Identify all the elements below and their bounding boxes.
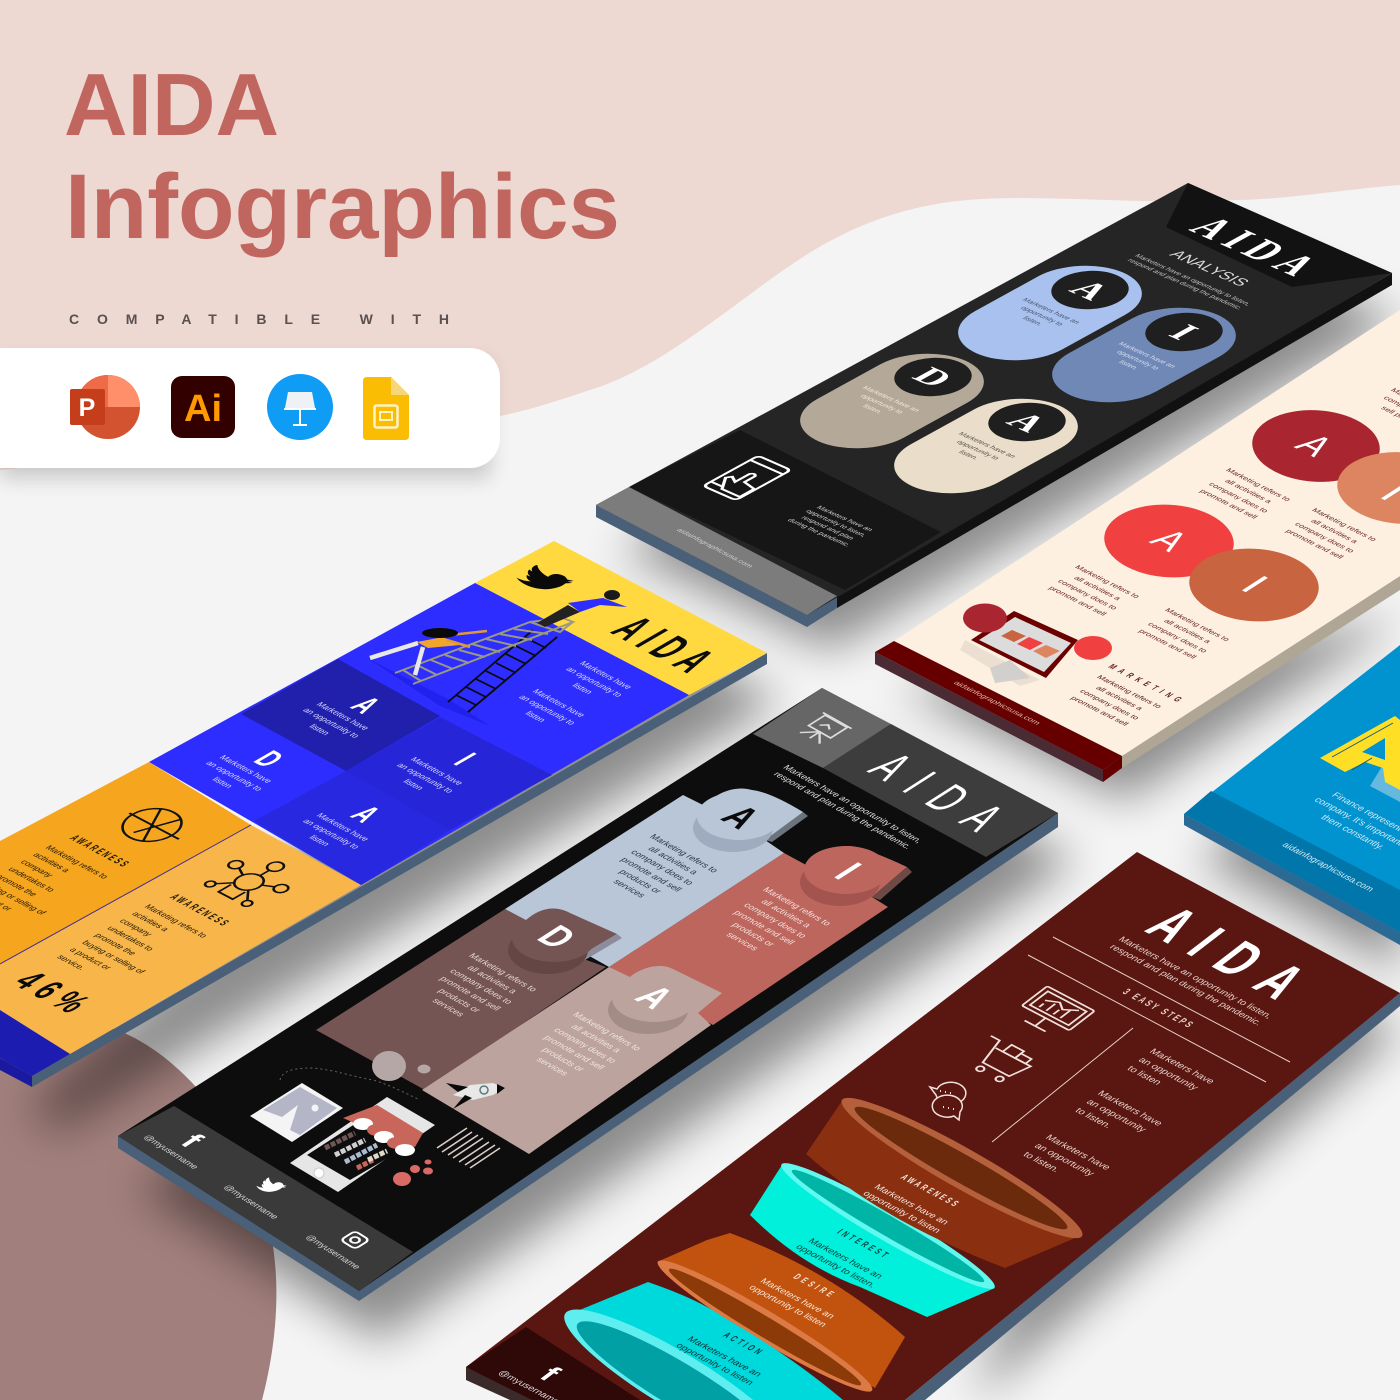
funnel: action: Marketers have an — [684, 1335, 764, 1379]
puzzle piece: A — [505, 788, 808, 967]
icon: google slides — [363, 377, 409, 440]
icon: powerpoint: P — [79, 394, 95, 422]
block: awareness one — [0, 834, 131, 924]
illustration: monitor — [960, 604, 1112, 686]
cell A: listen — [307, 723, 333, 737]
icon: keynote — [267, 374, 333, 440]
text blocks: marketing — [1043, 387, 1400, 662]
heading: AIDA: AIDA — [856, 746, 1016, 839]
icon: illustrator — [171, 376, 235, 438]
puzzle piece: D — [316, 909, 622, 1090]
pill: I: Marketers have an — [1116, 341, 1179, 369]
funnel: action — [564, 1282, 843, 1400]
text: analysis intro: respond and plan during the pandemic. — [1125, 258, 1244, 311]
cell A — [289, 692, 389, 746]
block: awareness two: buying or selling of — [80, 939, 148, 975]
cell A second — [289, 801, 389, 857]
puzzle piece: I: promote and sell — [731, 909, 797, 946]
background pink blob — [0, 0, 1400, 470]
panel: blue finance card — [1184, 645, 1400, 945]
puzzle piece: A second: all activities a — [569, 1023, 623, 1054]
text: website: aidainfographicsusa.com — [1280, 841, 1376, 893]
cell A: A — [342, 692, 389, 719]
puzzle piece: D: D — [528, 919, 586, 955]
funnel: action: opportunity to listen — [673, 1341, 756, 1387]
text blocks: steps: an opportunity — [1135, 1056, 1201, 1092]
heading: AIDA: AIDA — [1132, 898, 1319, 1009]
circle: A dark red — [1226, 395, 1400, 497]
block: awareness one: activities a — [31, 851, 73, 874]
icon: twitter bird — [514, 563, 575, 597]
pill: I: I — [1160, 320, 1208, 344]
text: top blocks: listen — [570, 682, 596, 696]
block: marketing: all activities a — [1094, 685, 1146, 712]
footer: instagram: @myusername — [304, 1233, 363, 1271]
puzzle piece: I: services — [724, 931, 761, 952]
cell A second: Marketers have — [314, 812, 372, 843]
text: phone description: Marketers have an — [814, 505, 875, 532]
puzzle piece: A: services — [611, 878, 648, 899]
text blocks: marketing: company does to — [1293, 521, 1356, 554]
pill: A second — [869, 386, 1103, 506]
funnel: desire: opportunity to listen — [746, 1283, 829, 1329]
panel: dark analysis card — [596, 183, 1392, 627]
cell A second: an opportunity to — [301, 817, 363, 850]
text: top blocks: Marketers have — [530, 688, 588, 719]
cell D: Marketers have — [217, 754, 275, 785]
title: Infographics — [65, 156, 620, 258]
block: awareness two: a product or — [67, 946, 114, 971]
illustration: marketing scene — [250, 1051, 505, 1192]
block: marketing: company does to — [1078, 688, 1141, 721]
cell I: I — [445, 748, 483, 770]
puzzle piece: A: promote and sell — [618, 856, 684, 893]
illustration: ladder and figures — [367, 590, 627, 726]
labels: interest — [793, 1227, 892, 1290]
text: top blocks: an opportunity to — [517, 693, 579, 726]
icon: powerpoint — [70, 375, 140, 439]
puzzle piece: A: all activities a — [646, 845, 700, 876]
panel: black puzzle card — [118, 688, 1058, 1301]
icon: phone with hand — [703, 456, 791, 500]
cell I: Marketers have — [408, 756, 466, 787]
icon: target — [108, 800, 201, 852]
block: awareness two: promote the — [92, 932, 139, 957]
block: awareness two: service. — [55, 953, 88, 971]
block: awareness two: undertakes to — [105, 924, 157, 952]
text: phone description: opportunity to listen, — [804, 509, 869, 538]
puzzle piece: D: Marketing refers to — [467, 952, 540, 993]
pill: D: D — [904, 362, 962, 392]
block: awareness one: AWARENESS — [66, 834, 131, 869]
cell D: an opportunity to — [204, 759, 266, 792]
puzzle piece: I: Marketing refers to — [761, 886, 834, 927]
text: phone description: respond and plan — [799, 515, 856, 541]
pill: A second: opportunity to — [954, 439, 1002, 461]
text blocks: steps: to listen. — [1020, 1150, 1062, 1174]
footer: twitter: @myusername — [222, 1183, 281, 1221]
pill: A: Marketers have an — [1020, 297, 1083, 325]
text blocks: steps: Marketers have — [1043, 1133, 1113, 1172]
text: top blocks: an opportunity to — [564, 665, 626, 698]
puzzle piece: I: company does to — [742, 901, 809, 940]
block: awareness two: activities a — [130, 910, 172, 933]
pill: D: opportunity to — [858, 393, 906, 415]
heading: 3 easy steps: 3 EASY STEPS — [1120, 986, 1197, 1029]
block: awareness one: company — [18, 858, 57, 879]
footer: facebook: @myusername — [142, 1133, 201, 1171]
text blocks: marketing: Marketing refers to — [1073, 564, 1142, 599]
text blocks: steps: Marketers have — [1095, 1089, 1165, 1128]
pill: D: listen. — [861, 403, 886, 415]
background mauve blob — [0, 1025, 276, 1400]
cell I — [383, 748, 483, 801]
pill: A: listen. — [1021, 315, 1046, 327]
block: marketing: Marketing refers to — [1095, 674, 1164, 709]
funnel: awareness: AWARENESS — [898, 1172, 962, 1208]
funnel: awareness: opportunity to listen — [860, 1189, 943, 1235]
puzzle piece: D: all activities a — [465, 964, 519, 995]
labels: interest: INTEREST — [834, 1227, 892, 1259]
cell A second: A — [342, 801, 389, 828]
cell D — [192, 746, 292, 799]
panel: blue and yellow card — [0, 541, 767, 1087]
block: marketing: MARKETING — [1106, 663, 1184, 703]
icon: presentation board — [795, 713, 852, 746]
pill: A: opportunity to — [1018, 305, 1066, 327]
text blocks: marketing: promote and sell — [1284, 528, 1346, 560]
text: website: aidainfographicsusa.com — [675, 527, 756, 569]
cell I: listen — [401, 778, 427, 792]
funnel: action: ACTION — [720, 1330, 765, 1356]
text blocks: steps: an opportunity — [1083, 1098, 1149, 1134]
text blocks: marketing: company does to — [1207, 481, 1270, 514]
panel: cream card — [875, 310, 1400, 782]
puzzle piece: A second — [422, 966, 722, 1154]
cell A: Marketers have — [314, 701, 372, 732]
puzzle piece: I: all activities a — [759, 898, 813, 929]
text: analysis intro: Marketers have an opportunity to listen, — [1133, 253, 1253, 307]
text: intro: Marketers have an opportunity to listen, — [781, 763, 925, 844]
heading: analysis: ANALYSIS — [1165, 248, 1253, 289]
text: phone description: during the pandemic. — [785, 517, 853, 548]
text blocks: marketing: Marketing refers to — [1310, 507, 1379, 542]
circle: A dark red: A — [1286, 428, 1344, 462]
text blocks: marketing: Marketing refers to — [1224, 467, 1293, 502]
icon: monitor chart — [1011, 986, 1095, 1038]
puzzle piece: I: I — [825, 856, 871, 885]
labels: interest: Marketers have an — [805, 1237, 885, 1281]
heading: AIDA: AIDA — [599, 609, 728, 679]
puzzle piece: I: products or — [730, 921, 777, 948]
puzzle piece: A second: company does to — [552, 1026, 619, 1065]
puzzle piece: D: services — [430, 997, 467, 1018]
block: marketing: promote and sell — [1069, 695, 1131, 727]
funnel: desire — [650, 1233, 905, 1400]
title — [64, 55, 620, 258]
block: awareness two: company — [117, 917, 156, 938]
text blocks: steps: to listen — [1124, 1064, 1164, 1087]
heading: AIDA: AIDA — [1179, 211, 1329, 281]
pill: D — [775, 341, 1009, 461]
text blocks: steps: Marketers have — [1147, 1047, 1217, 1086]
circle: I brown orange — [1163, 534, 1345, 636]
text: top blocks: Marketers have — [577, 660, 635, 691]
text blocks: marketing: all activities a — [1309, 518, 1361, 545]
labels: interest: opportunity to listen. — [793, 1243, 878, 1290]
puzzle piece: A second: Marketing refers to — [571, 1011, 644, 1052]
text: website: aidainfographicsusa.com — [952, 680, 1043, 726]
cell A: an opportunity to — [301, 706, 363, 739]
cell I: an opportunity to — [395, 761, 457, 794]
circle: I light orange — [1311, 437, 1400, 539]
block: awareness two: Marketing refers to — [142, 903, 210, 939]
panel: maroon funnel card — [466, 852, 1400, 1400]
text blocks: steps: an opportunity — [1031, 1142, 1097, 1178]
text: top blocks: listen — [523, 710, 549, 724]
pill: I: opportunity to — [1114, 349, 1162, 371]
cell A second: listen — [307, 834, 333, 848]
icon: chat bubbles — [930, 1082, 966, 1120]
funnel: desire: Marketers have an — [757, 1277, 837, 1321]
text: intro: respond and plan during the pandemic. — [771, 770, 914, 850]
footer: social: f — [533, 1363, 567, 1386]
text blocks: steps: to listen. — [1072, 1106, 1114, 1130]
block: awareness one: Marketing refers to — [43, 844, 111, 880]
text blocks: marketing: company does to — [1056, 578, 1119, 611]
circle: A red — [1078, 490, 1260, 592]
text blocks: marketing: promote and sell — [1137, 628, 1199, 660]
icon: illustrator: Ai — [184, 388, 222, 430]
pill: A second: Marketers have an — [956, 431, 1019, 459]
pill: A second: listen. — [957, 449, 982, 461]
block: awareness two: AWARENESS — [166, 893, 231, 928]
pill: D: Marketers have an — [860, 385, 923, 413]
pill: I: listen. — [1117, 359, 1142, 371]
funnel: desire: DESIRE — [791, 1272, 837, 1298]
puzzle piece: A: Marketing refers to — [648, 833, 721, 874]
pill: A: A — [1061, 275, 1120, 305]
text blocks: marketing: all activities a — [1072, 575, 1124, 602]
puzzle piece: D: products or — [436, 987, 483, 1014]
text blocks: marketing: all activities a — [1162, 618, 1214, 645]
puzzle piece: A: company does to — [629, 848, 696, 887]
puzzle piece: A second: products or — [540, 1046, 587, 1073]
title: AIDA — [64, 55, 279, 154]
subtitle: compatible with: COMPATIBLE WITH — [69, 311, 449, 327]
puzzle piece: A second: services — [534, 1056, 571, 1077]
footer: facebook: f — [174, 1129, 210, 1152]
puzzle piece: A: A — [712, 799, 770, 835]
text blocks: steps — [1020, 1047, 1217, 1189]
text blocks: marketing: Marketing refers to — [1163, 607, 1232, 642]
text: intro: respond and plan during the pandemic. — [1107, 943, 1264, 1028]
text: top blocks — [505, 659, 637, 733]
stat: 46%: 46% — [5, 966, 100, 1018]
icon: shopping cart — [958, 1035, 1040, 1086]
text blocks: marketing: all activities a — [1223, 478, 1275, 505]
text blocks: marketing: promote and sell — [1198, 488, 1260, 520]
funnel: awareness — [806, 1083, 1092, 1268]
block: marketing — [1065, 663, 1184, 729]
funnel: interest — [750, 1152, 1002, 1317]
letter: 3D A — [1320, 716, 1400, 790]
puzzle piece: A: products or — [617, 868, 664, 895]
block: awareness one: undertakes to — [6, 865, 58, 893]
text: finance: them constantly. — [1318, 813, 1387, 852]
text blocks: marketing: promote and sell — [1047, 585, 1109, 617]
text: intro: Marketers have an opportunity to listen, — [1116, 935, 1275, 1020]
pill: I — [1027, 295, 1261, 415]
puzzle piece: D: company does to — [448, 967, 515, 1006]
circle: A red: A — [1141, 523, 1199, 557]
text blocks: marketing: company does to — [1146, 621, 1209, 654]
puzzle piece: A second: A — [626, 979, 684, 1015]
puzzle piece: I — [609, 846, 912, 1025]
puzzle piece: D: promote and sell — [437, 975, 503, 1012]
funnel: awareness: Marketers have an — [871, 1183, 951, 1227]
cell D: D — [245, 746, 292, 773]
pill: A — [933, 253, 1167, 373]
puzzle piece: A second: promote and sell — [541, 1034, 607, 1071]
icon: idea network — [197, 849, 309, 910]
pill: A second: A — [998, 407, 1057, 437]
block: awareness two — [55, 893, 231, 990]
circle: I brown orange: I — [1231, 570, 1278, 598]
panel: software icons — [0, 348, 500, 468]
cell D: listen — [210, 776, 236, 790]
